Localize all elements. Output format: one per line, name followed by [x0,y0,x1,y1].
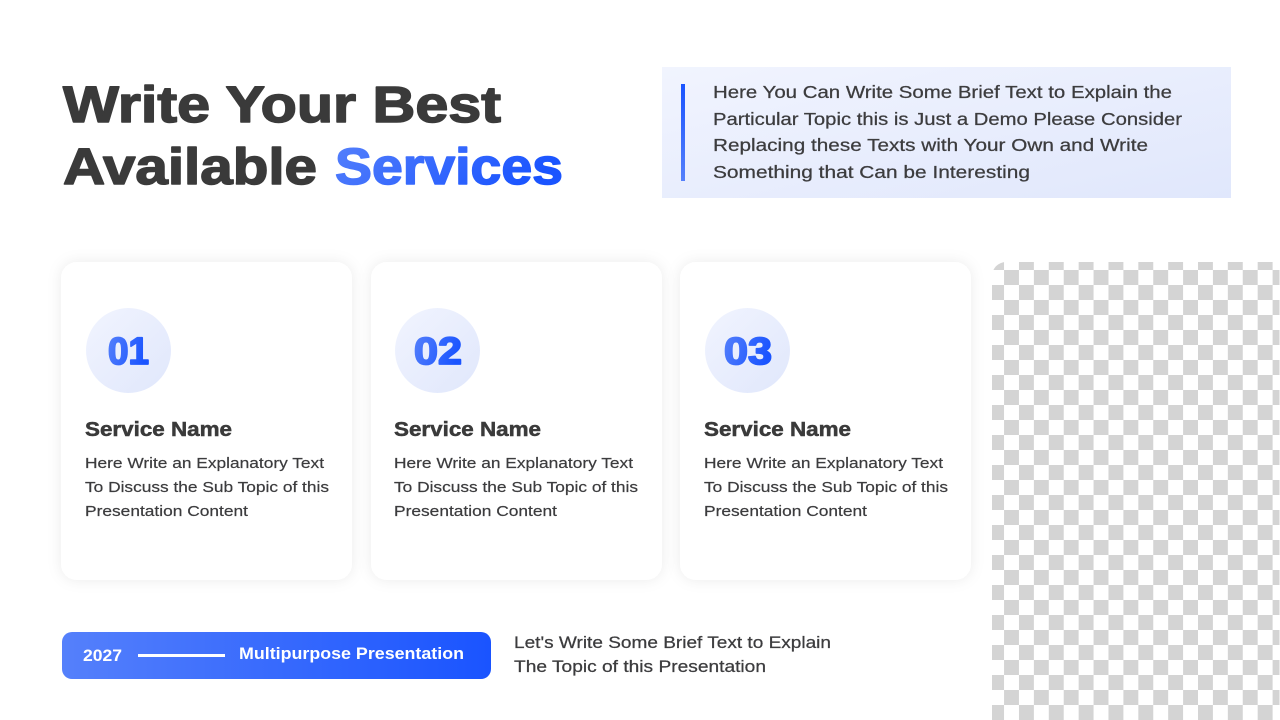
number badge 03: 03 [724,331,772,373]
description 01: To Discuss the Sub Topic of this [85,480,329,496]
description 03: Here Write an Explanatory Text [704,456,943,472]
number badge 01: 01 [108,331,149,373]
intro paragraph: Particular Topic this is Just a Demo Please Consider [713,109,1182,129]
number badge 02: 02 [414,331,462,373]
description 01: Here Write an Explanatory Text [85,456,324,472]
banner: year and presentation label [62,632,491,679]
description 03 [704,456,948,520]
description 01: Presentation Content [85,504,248,520]
service name 01: Service Name [85,419,232,441]
image placeholder: transparency checkerboard [992,262,1280,720]
connector line [138,654,225,657]
description 02 [394,456,638,520]
description 03: To Discuss the Sub Topic of this [704,480,948,496]
title: Available [63,138,317,195]
intro paragraph: Here You Can Write Some Brief Text to Explain the [713,82,1172,102]
year: 2027 [83,646,122,665]
description 02: Here Write an Explanatory Text [394,456,633,472]
footer text: The Topic of this Presentation [514,658,766,676]
intro paragraph: Something that Can be Interesting [713,162,1030,182]
description 01 [85,456,329,520]
intro paragraph [713,82,1182,182]
service name 02: Service Name [394,419,541,441]
panel: intro text [662,67,1231,198]
footer text: Let's Write Some Brief Text to Explain [514,634,831,652]
number badge 02 [395,308,480,393]
panel: service card 01 [61,262,352,580]
title: Write Your Best [63,76,501,133]
number badge 03 [705,308,790,393]
intro paragraph: Replacing these Texts with Your Own and Write [713,135,1148,155]
description 03: Presentation Content [704,504,867,520]
description 02: Presentation Content [394,504,557,520]
title: Services [335,138,563,195]
accent bar [681,84,685,181]
banner label: Multipurpose Presentation [239,644,464,663]
panel: service card 03 [680,262,971,580]
description 02: To Discuss the Sub Topic of this [394,480,638,496]
panel: service card 02 [371,262,662,580]
number badge 01 [86,308,171,393]
footer text [514,634,831,676]
service name 03: Service Name [704,419,851,441]
title [63,76,563,195]
